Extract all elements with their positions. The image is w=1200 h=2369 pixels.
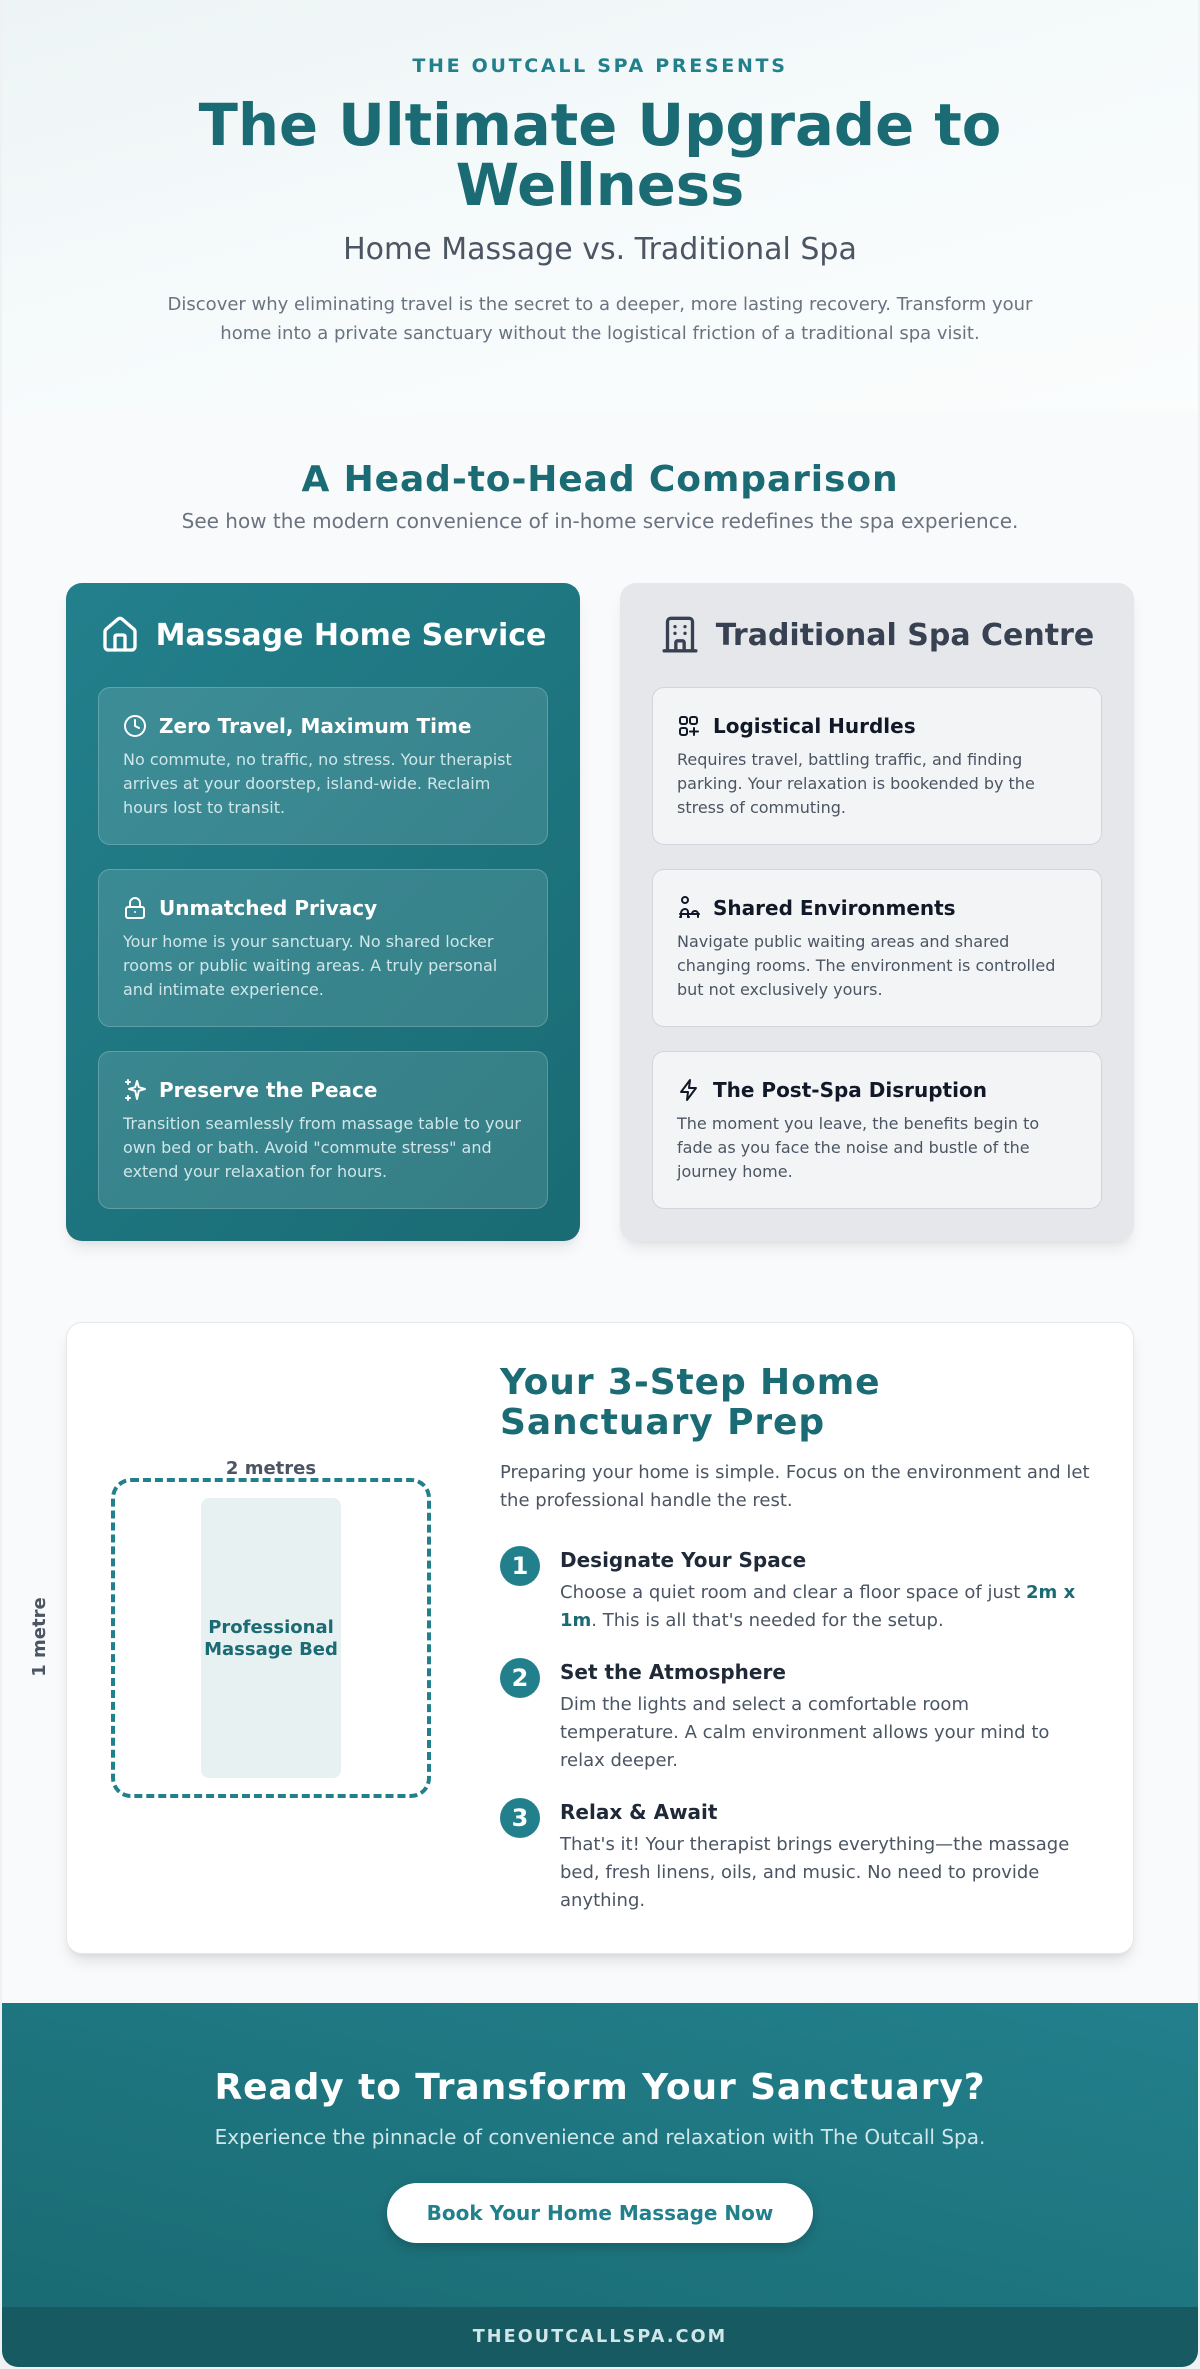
card title: zero travel: Zero Travel, Maximum Time xyxy=(159,714,471,738)
footer xyxy=(2,2307,1198,2367)
steps list xyxy=(500,1546,1075,1911)
label: 1 metre: 1 metre xyxy=(29,1597,50,1677)
comparison heading: A Head-to-Head Comparison xyxy=(301,459,899,500)
card title: preserve the peace: Preserve the Peace xyxy=(159,1078,377,1102)
step 3 title: Relax & Await xyxy=(560,1800,717,1824)
step 2 number xyxy=(500,1658,540,1698)
eyebrow: THE OUTCALL SPA PRESENTS xyxy=(412,55,788,77)
step 2 text xyxy=(560,1694,1049,1771)
panel: traditional spa centre xyxy=(620,583,1134,1241)
step 1 title: Designate Your Space xyxy=(560,1548,806,1572)
subtitle: Home Massage vs. Traditional Spa xyxy=(343,232,857,267)
step 3 number: 3 xyxy=(512,1804,528,1832)
comparison subheading: See how the modern convenience of in-home service redefines the spa experience. xyxy=(182,509,1018,533)
main title xyxy=(198,92,1001,219)
intro text xyxy=(168,294,1032,344)
step 2 text: Dim the lights and select a comfortable room xyxy=(560,1694,969,1715)
step 3 text xyxy=(560,1834,1069,1911)
card: preserve the peace xyxy=(98,1051,548,1209)
card title: logistical hurdles: Logistical Hurdles xyxy=(713,714,916,738)
card: logistical hurdles xyxy=(652,687,1102,845)
prep intro xyxy=(500,1462,1090,1511)
card text: preserve the peace: Transition seamlessly from massage table to your own bed or bath. Avoid "commute stress" and extend your relaxation for hours. xyxy=(123,1114,521,1181)
prep heading: Your 3-Step Home xyxy=(500,1362,880,1403)
label: 2 metres: 2 metres xyxy=(226,1458,316,1479)
step 2 number: 2 xyxy=(512,1664,528,1692)
card text: unmatched privacy: Your home is your sanctuary. No shared locker rooms or public waiting areas. A truly personal and intimate experience. xyxy=(123,932,497,999)
cta button: Book Your Home Massage Now xyxy=(427,2201,773,2225)
prep heading xyxy=(500,1362,880,1443)
diagram: floor space xyxy=(29,1458,431,1798)
panel heading: massage home service: Massage Home Service xyxy=(156,618,546,652)
call to action band xyxy=(2,2003,1198,2307)
step 3 text: bed, fresh linens, oils, and music. No need to provide xyxy=(560,1862,1039,1883)
step 3 text: That's it! Your therapist brings everything—the massage xyxy=(560,1834,1069,1855)
step 2 text: temperature. A calm environment allows your mind to xyxy=(560,1722,1049,1743)
step 2 text: relax deeper. xyxy=(560,1750,678,1771)
cta button xyxy=(387,2183,813,2243)
card title: shared environments: Shared Environments xyxy=(713,896,956,920)
card title: unmatched privacy: Unmatched Privacy xyxy=(159,896,377,920)
intro text: home into a private sanctuary without the logistical friction of a traditional spa visit. xyxy=(220,323,980,344)
step 3 text: anything. xyxy=(560,1890,645,1911)
card: shared environments xyxy=(652,869,1102,1027)
step 1 number: 1 xyxy=(512,1552,528,1580)
panel heading: traditional spa centre: Traditional Spa Centre xyxy=(716,618,1094,652)
prep intro: Preparing your home is simple. Focus on the environment and let xyxy=(500,1462,1090,1483)
cta text: Experience the pinnacle of convenience and relaxation with The Outcall Spa. xyxy=(215,2125,985,2149)
cta heading: Ready to Transform Your Sanctuary? xyxy=(214,2067,986,2108)
card: post-spa disruption xyxy=(652,1051,1102,1209)
panel: massage home service xyxy=(66,583,580,1241)
card title: post-spa disruption: The Post-Spa Disruption xyxy=(713,1078,987,1102)
prep intro: the professional handle the rest. xyxy=(500,1490,793,1511)
card: zero travel xyxy=(98,687,548,845)
massage bed xyxy=(201,1498,341,1778)
step 1 number xyxy=(500,1546,540,1586)
panel: 3-step prep xyxy=(66,1322,1134,1954)
step 1 text xyxy=(560,1582,1075,1631)
massage bed: Professional xyxy=(208,1617,334,1638)
step 1 text: 1m. This is all that's needed for the setup. xyxy=(560,1610,944,1631)
card text: shared environments: Navigate public waiting areas and shared changing rooms. The environment is controlled but not exclusively yours. xyxy=(677,932,1055,999)
dashed space outline xyxy=(111,1478,431,1798)
card text: logistical hurdles: Requires travel, battling traffic, and finding parking. Your relaxation is bookended by the stress of commuting. xyxy=(677,750,1035,817)
prep heading: Sanctuary Prep xyxy=(500,1402,825,1443)
card text: post-spa disruption: The moment you leave, the benefits begin to fade as you face the noise and bustle of the journey home. xyxy=(677,1114,1039,1181)
hero header xyxy=(2,0,1198,411)
step 3 number xyxy=(500,1798,540,1838)
card: unmatched privacy xyxy=(98,869,548,1027)
card text: zero travel: No commute, no traffic, no stress. Your therapist arrives at your doorstep, island-wide. Reclaim hours lost to transit. xyxy=(123,750,512,817)
massage bed: Massage Bed xyxy=(204,1639,338,1660)
step 1 text: Choose a quiet room and clear a floor space of just 2m x xyxy=(560,1582,1075,1603)
main title: The Ultimate Upgrade to xyxy=(199,92,1001,159)
footer: THEOUTCALLSPA.COM xyxy=(473,2327,727,2347)
intro text: Discover why eliminating travel is the secret to a deeper, more lasting recovery. Transform your xyxy=(168,294,1032,315)
main title: Wellness xyxy=(456,152,744,219)
step 2 title: Set the Atmosphere xyxy=(560,1660,786,1684)
